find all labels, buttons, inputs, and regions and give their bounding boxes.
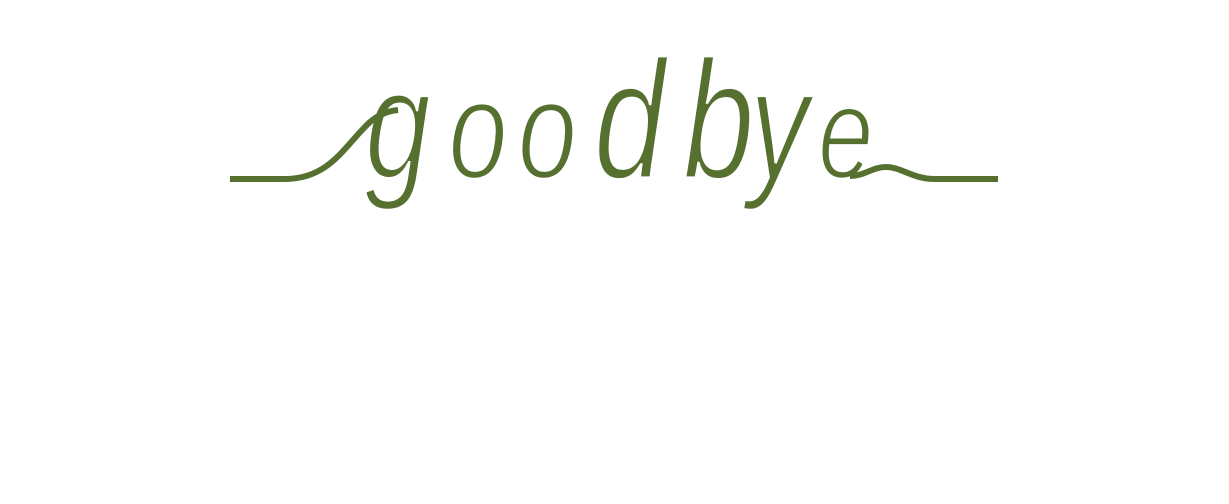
- title: goodbye word: goodbye: [365, 25, 873, 214]
- swash: lead-out line: [850, 167, 998, 179]
- swash: lead-in line: [230, 110, 398, 179]
